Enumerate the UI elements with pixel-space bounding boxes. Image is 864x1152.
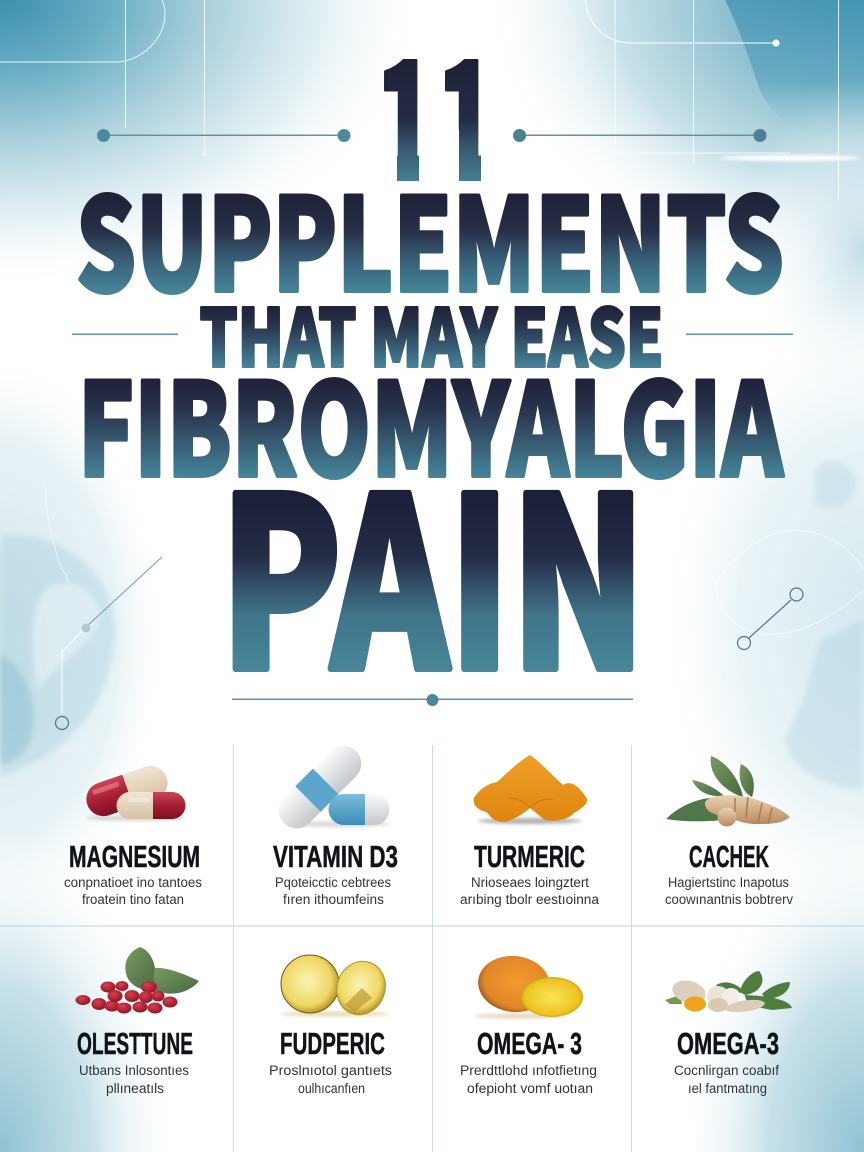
icon: turmeric powder mound [474,755,587,824]
panel: olestune [76,947,199,1096]
network node: left circle [56,716,68,730]
network connector: right [738,588,803,650]
panel: ginger root [665,756,793,907]
description [269,1063,392,1096]
heading: CACHEK [689,839,769,874]
panel: turmeric [460,755,599,907]
title: subtitle: THAT MAY EASE [200,274,664,390]
heading: MAGNESIUM [69,839,200,874]
panel: omega-3 softgels [460,952,597,1096]
description: Prerdttlohd ınfotfietıng [460,1063,597,1078]
accent rule: right of subtitle [686,334,793,335]
description [460,875,599,907]
title accent line: top left [97,129,350,142]
divider with dot [232,694,633,706]
panel: magnesium [64,761,202,907]
description [275,875,391,907]
icon: red berries with leaves [76,947,199,1014]
title accent line: top right [513,129,766,142]
description: Pqoteicctic cebtrees [275,875,391,890]
description: Proslnıotol gantıets [269,1063,392,1078]
description [79,1063,189,1096]
accent rule: left of subtitle [72,334,178,335]
heading: FUDPERIC [280,1026,385,1061]
description: conpnatioet ino tantoes [64,875,202,890]
title: pain: PAIN [220,396,646,736]
network line: left [82,557,162,632]
icon: red and cream capsules [82,761,186,821]
description: fıren ithoumfeins [283,892,384,907]
description [674,1063,779,1096]
panel: vitamin d3 [271,738,398,907]
icon: herbs and roots [665,971,792,1014]
description: Utbans Inlosontıes [79,1063,189,1078]
description: Nrioseaes loingztert [471,875,589,890]
icon: golden softgels [280,954,393,1022]
panel: fudperic [269,954,393,1096]
description: froatein tino fatan [82,892,184,907]
decorative network lines [0,0,864,713]
description: Cocnlirgan coabıf [674,1063,779,1078]
description: Hagiertstinc Inapotus [668,875,789,890]
description: pllıneatıls [106,1081,164,1096]
heading: OMEGA- 3 [477,1026,582,1061]
heading: TURMERIC [474,839,585,874]
icon: ginger root with leaves [666,756,790,826]
icon: amber and yellow softgels [475,952,583,1018]
description [460,1063,597,1096]
description: ıel fantmatıng [688,1081,767,1096]
heading: OLESTTUNE [77,1026,193,1061]
description: oulhıcanfıen [298,1081,365,1096]
description: coowınantnis bobtrerv [665,892,793,907]
grid lines [0,745,864,1152]
heading: VITAMIN D3 [273,839,398,874]
title [76,0,784,736]
description [665,875,793,907]
heading: OMEGA-3 [677,1026,779,1061]
description: arıbing tbolr eestıoinna [460,892,599,907]
panel: omega-3 herbs [665,971,792,1096]
icon: white and blue capsules [271,738,390,836]
description: ofepioht vomf uotıan [467,1081,593,1096]
description [64,875,202,907]
